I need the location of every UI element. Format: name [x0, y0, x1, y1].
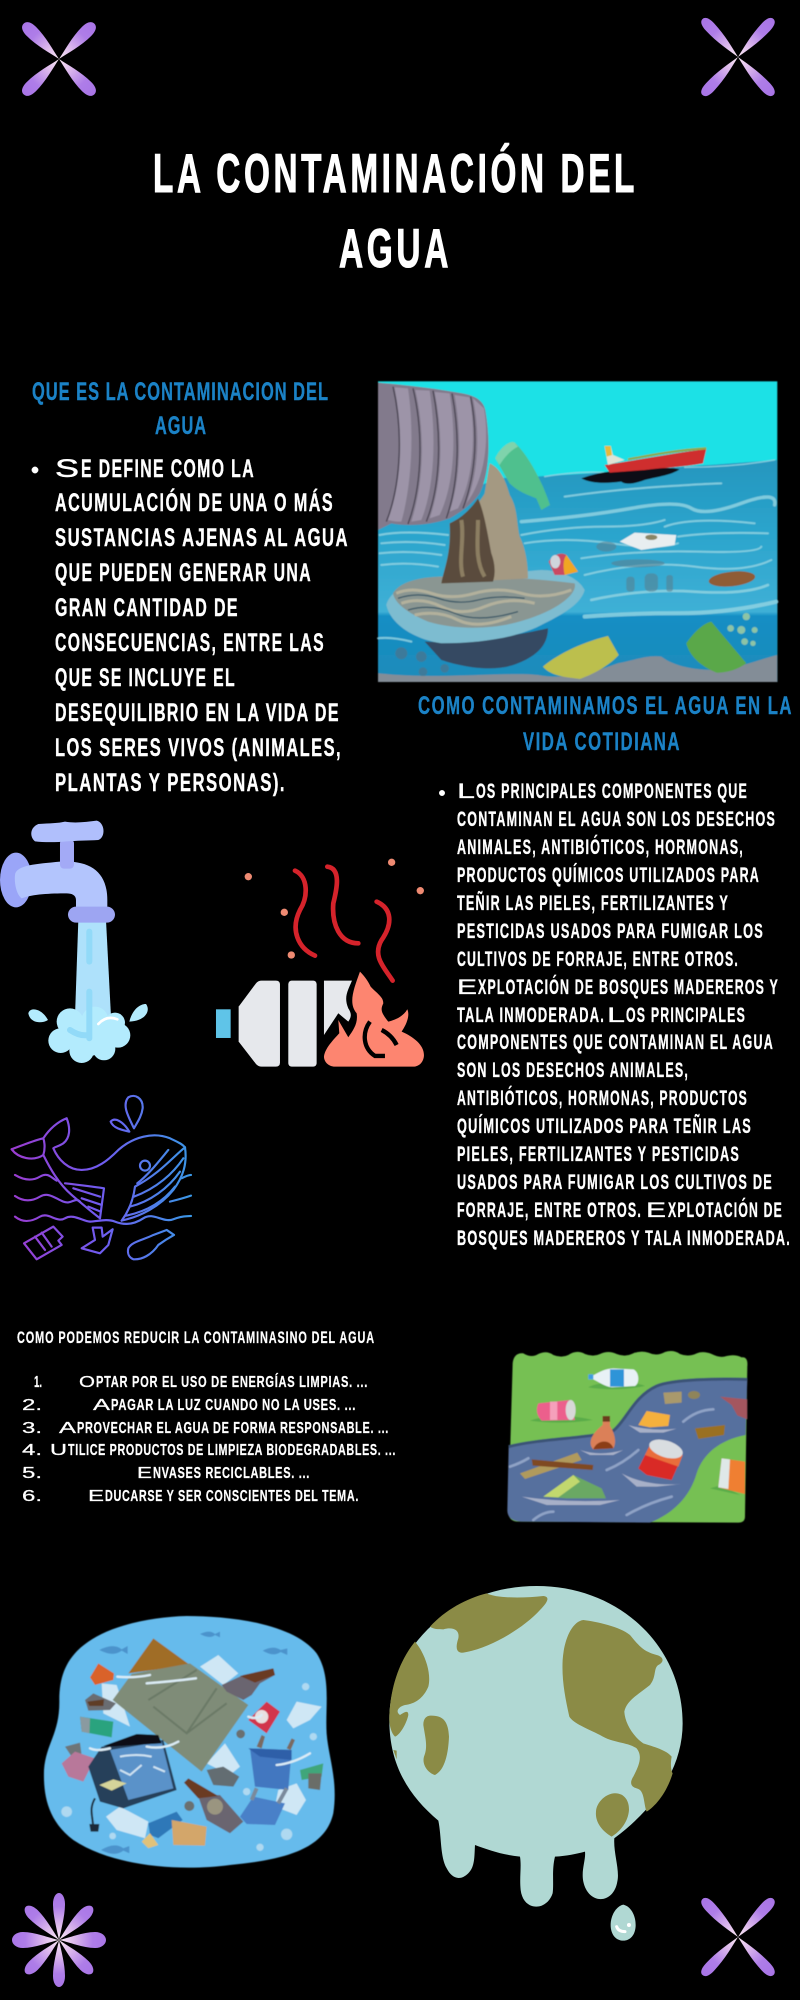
text block: definition: LOS SERES VIVOS (ANIMALES, [55, 734, 342, 762]
sub: blue can and card [148, 1812, 183, 1838]
numbered list: reduction measures: 6. [22, 1488, 42, 1505]
sub: bottle [239, 981, 352, 1067]
sub: ship [605, 449, 706, 473]
sub: belly stripes [73, 1147, 185, 1221]
sub: green bag [543, 1475, 606, 1498]
text block: components: L [607, 1004, 625, 1027]
sub: shoe [85, 1693, 116, 1711]
text block: definition: S [55, 455, 79, 483]
text block: components: E [457, 976, 477, 999]
sub: water blob [44, 1616, 335, 1868]
sub: continents [389, 1593, 673, 1837]
sub: sludge stream [441, 463, 528, 583]
sub: sludge shadow [425, 628, 548, 668]
text block: definition: CONSECUENCIAS, ENTRE LAS [55, 629, 325, 657]
text block: components: FORRAJE, ENTRE OTROS. [457, 1199, 642, 1222]
sub: blue chair [257, 1735, 295, 1750]
sub: bottle on grass [588, 1368, 638, 1387]
text block: definition: DESEQUILIBRIO EN LA VIDA DE [55, 699, 340, 727]
sub: tail and body [12, 1118, 186, 1221]
numbered list: reduction measures: 4. [22, 1442, 42, 1459]
text block: definition: QUE PUEDEN GENERAR UNA [55, 559, 312, 587]
sub: pink can [537, 1400, 575, 1421]
sub: bubbles [727, 613, 758, 646]
sub: smoke [295, 867, 393, 981]
sub: droplets [28, 1009, 48, 1022]
sub: wooden plank [695, 1425, 725, 1439]
numbered list: reduction measures: PTAR POR EL USO DE ENERGÍAS LIMPIAS. ... [96, 1372, 368, 1391]
sub: rocks [65, 1743, 82, 1757]
sub: plastic bags [102, 1655, 322, 1838]
sub: spout [15, 862, 107, 910]
text block: components: L [457, 780, 475, 803]
sub: bottle [495, 442, 550, 510]
sub: red carton [248, 1702, 280, 1733]
text block: components: TALA INMODERADA. [457, 1004, 605, 1027]
numbered list: reduction measures: 3. [22, 1420, 42, 1437]
icon: faucet [0, 821, 148, 1063]
sub: stem [60, 839, 74, 869]
numbered list: reduction measures: E [88, 1488, 104, 1505]
sub: oil slick [581, 468, 680, 484]
sub: grass blades under items [530, 1382, 740, 1495]
text block: definition: SUSTANCIAS AJENAS AL AGUA [55, 524, 349, 552]
numbered list: reduction measures: A [93, 1397, 111, 1414]
sub: globe [389, 1586, 683, 1907]
numbered list: reduction measures: 2. [22, 1397, 42, 1414]
sub: green barrel [686, 622, 746, 673]
text block: definition: PLANTAS Y PERSONAS). [55, 769, 286, 797]
illustration: polluted sea with drain pipe [378, 381, 777, 682]
sub: cabinet [113, 1663, 248, 1772]
heading: que es la contaminacion [32, 378, 329, 440]
icon: whale with trash [12, 1096, 191, 1259]
sub: cap [216, 1009, 231, 1038]
sub: water stream [75, 920, 111, 1017]
sub: splash [386, 570, 585, 643]
heading: como contaminamos: VIDA COTIDIANA [523, 728, 681, 756]
sub: logs [520, 1453, 582, 1479]
text block: definition: E DEFINE COMO LA [81, 455, 255, 483]
text block: components [439, 780, 791, 1250]
numbered list: reduction measures [22, 1372, 396, 1505]
sub: top right debris [720, 1397, 747, 1419]
illustration: polluted river [507, 1351, 747, 1523]
numbered list: reduction measures: DUCARSE Y SER CONSCIENTES DEL TEMA. [105, 1488, 359, 1505]
heading: como podemos reducir: COMO PODEMOS REDUCIR LA CONTAMINASINO DEL AGUA [17, 1328, 375, 1347]
sub: eye [140, 1161, 150, 1171]
illustration: floating garbage [44, 1616, 335, 1868]
sub: sparks [245, 859, 424, 959]
sub: river [507, 1379, 747, 1523]
sub: brown box [128, 1638, 190, 1673]
numbered list: reduction measures: 1. [34, 1374, 42, 1391]
sub: log [708, 569, 756, 589]
sub: brown bottle [591, 1416, 615, 1449]
sub: flange [0, 853, 32, 907]
sub: red can [638, 1445, 683, 1480]
numbered list: reduction measures: 5. [22, 1465, 42, 1482]
sub: lower bottle [198, 1795, 243, 1833]
sub: spout [111, 1096, 143, 1132]
sub: green box [300, 1763, 323, 1780]
text block: definition: GRAN CANTIDAD DE [55, 594, 239, 622]
sub: box on grass [718, 1458, 745, 1494]
numbered list: reduction measures: A [59, 1420, 77, 1437]
heading: como contaminamos [418, 692, 793, 756]
sub: chips bag [638, 1411, 670, 1427]
heading: que es la contaminacion: AGUA [155, 412, 207, 440]
numbered list: reduction measures: E [137, 1465, 152, 1482]
text block: definition: QUE SE INCLUYE EL [55, 664, 236, 692]
numbered list: reduction measures: PROVECHAR EL AGUA DE FORMA RESPONSABLE. ... [77, 1420, 389, 1437]
numbered list: reduction measures: TILICE PRODUCTOS DE LIMPIEZA BIODEGRADABLES. ... [68, 1442, 396, 1459]
sub: floating paper [620, 533, 676, 550]
sub: orange bottle [90, 1663, 114, 1685]
illustration: melting earth [389, 1586, 683, 1941]
sub: swirls and bubbles [90, 1675, 310, 1765]
sub: pipe [378, 383, 489, 530]
icon: flower bottom right [699, 1895, 777, 1979]
sub: can [549, 554, 578, 575]
sub: gray rock [207, 1767, 239, 1787]
sub: handle [31, 821, 104, 842]
sub: waves [378, 460, 776, 642]
numbered list: reduction measures: U [50, 1442, 67, 1459]
sub: green can [80, 1717, 113, 1737]
numbered list: reduction measures: NVASES RECICLABLES. ... [153, 1465, 310, 1482]
title [153, 142, 638, 279]
sub: flame [324, 972, 424, 1067]
sub: rocks [663, 1392, 682, 1404]
sub: murky streaks [596, 542, 673, 592]
sub: bottle top right [222, 1668, 275, 1700]
sub: yellow barrel [543, 636, 619, 679]
icon: flower top right [699, 15, 777, 99]
numbered list: reduction measures: PAGAR LA LUZ CUANDO NO LA USES. ... [111, 1397, 356, 1414]
sub: grass [508, 1351, 747, 1523]
sub: wavelets [510, 1409, 713, 1520]
heading: que es la contaminacion: QUE ES LA CONTAMINACION DEL [32, 378, 329, 406]
sub: sea floor [378, 655, 777, 682]
text block: definition [32, 455, 349, 797]
sub: collar [68, 907, 115, 923]
sub: foam [48, 1007, 130, 1063]
icon: flower top left [19, 19, 99, 99]
sub: waves [15, 1175, 191, 1224]
sub: fish [99, 1632, 287, 1854]
icon: burning bottle [216, 859, 424, 1067]
numbered list: reduction measures: O [79, 1374, 95, 1391]
title: AGUA [339, 217, 452, 279]
sub: sock [82, 1228, 113, 1253]
sub: television [88, 1740, 177, 1808]
sub: bottle right [128, 1230, 174, 1259]
text block: definition: ACUMULACIÓN DE UNA O MÁS [55, 487, 334, 517]
text block: components: E [646, 1199, 666, 1222]
sub: drop [611, 1905, 636, 1941]
icon: star flower bottom left [12, 1893, 106, 1987]
sub: bottle [24, 1227, 63, 1259]
sub: pink bottle [62, 1752, 95, 1782]
